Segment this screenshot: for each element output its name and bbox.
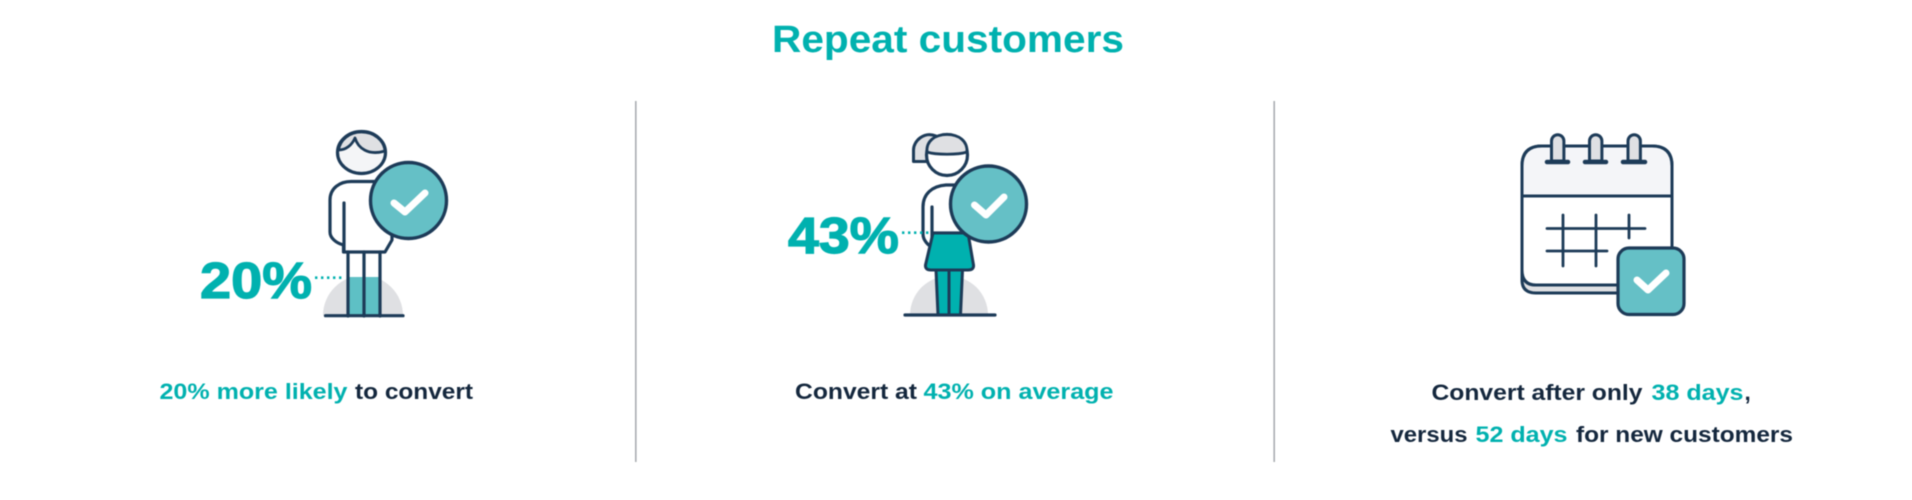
- ground semicircle: [323, 276, 403, 316]
- legs: [936, 270, 962, 315]
- ponytail: [914, 135, 937, 162]
- calendar page: [1522, 146, 1672, 285]
- panel: 43% on average: [788, 134, 1114, 404]
- ground line: [326, 314, 403, 317]
- dotted leader: [902, 231, 929, 234]
- statistic: 43%: 43%: [788, 207, 899, 264]
- title: Repeat customers: [772, 19, 1124, 61]
- ground semicircle: [910, 276, 988, 315]
- torso: [330, 182, 392, 252]
- icon: man with check badge: [323, 132, 446, 316]
- caption: for new customers: [1576, 422, 1793, 447]
- date grid: [1547, 215, 1645, 266]
- ground line: [905, 313, 995, 317]
- caption: [1390, 380, 1793, 447]
- skirt: [925, 233, 974, 270]
- panel: 38 days vs 52 days: [1390, 135, 1793, 447]
- caption: [795, 379, 1114, 404]
- statistic: 20%: 20%: [200, 252, 312, 309]
- caption: 52 days: [1476, 422, 1568, 447]
- legs: [348, 251, 380, 316]
- caption: 20% more likely: [160, 379, 348, 404]
- divider: left: [635, 101, 637, 462]
- caption: Convert after only: [1432, 380, 1643, 405]
- head: [926, 134, 968, 176]
- check badge: [1618, 248, 1684, 314]
- torso: [923, 185, 978, 248]
- calendar header: [1522, 146, 1672, 196]
- back page: [1522, 270, 1625, 293]
- caption: Convert at: [795, 379, 918, 404]
- dotted leader: [315, 276, 343, 279]
- icon: calendar with check: [1522, 135, 1684, 314]
- caption: 38 days: [1652, 380, 1744, 405]
- caption: 43% on average: [924, 379, 1114, 404]
- check badge: [950, 166, 1026, 242]
- caption: to convert: [355, 379, 474, 404]
- icon: woman with check badge: [905, 134, 1026, 315]
- head: [338, 132, 386, 174]
- caption: ,: [1744, 380, 1751, 405]
- check badge: [370, 162, 446, 238]
- caption: [160, 379, 474, 404]
- binder rings: [1547, 135, 1645, 162]
- caption: versus: [1390, 422, 1468, 447]
- divider: right: [1273, 101, 1275, 462]
- panel: 20% more likely: [160, 132, 474, 404]
